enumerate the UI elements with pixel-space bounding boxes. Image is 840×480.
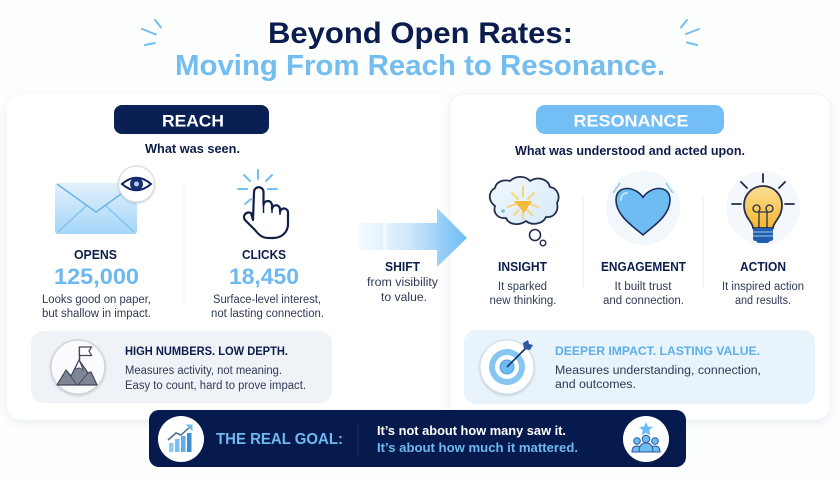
icon: mountain flag (51, 340, 105, 394)
callout: deeper impact (464, 330, 815, 404)
metric: opens: 125,000 (54, 264, 139, 289)
panel: resonance (450, 94, 830, 420)
metric: opens (42, 247, 151, 320)
callout: high numbers (31, 331, 332, 403)
goal statement: It’s about how much it mattered. (377, 441, 578, 455)
icon: growth chart (158, 416, 204, 462)
item: action (722, 259, 804, 307)
icon: light bulb (726, 171, 800, 245)
icon: heart (606, 171, 680, 245)
item: engagement: and connection. (603, 295, 684, 307)
item: engagement: It built trust (614, 281, 672, 293)
sparkle left (142, 20, 161, 45)
arrow: shift (358, 208, 467, 267)
metric: clicks: CLICKS (242, 247, 286, 262)
metric: opens: but shallow in impact. (42, 308, 151, 320)
metric: opens: Looks good on paper, (42, 294, 151, 306)
metric: clicks (211, 247, 324, 320)
callout: high numbers: Measures activity, not meaning. (125, 365, 282, 377)
title line 2: Moving From Reach to Resonance. (175, 50, 665, 82)
item: insight (490, 259, 556, 307)
metric: clicks: 18,450 (229, 264, 299, 289)
panel: reach (7, 94, 452, 420)
resonance subtitle: What was understood and acted upon. (515, 144, 745, 158)
shift label: SHIFT (385, 260, 420, 274)
banner: the real goal: THE REAL GOAL: (216, 431, 343, 448)
panel background (7, 94, 452, 420)
icon: thought cloud (490, 177, 559, 246)
item: engagement (601, 259, 686, 307)
item: insight: It sparked (498, 281, 547, 293)
metric: clicks: Surface-level interest, (213, 294, 321, 306)
reach pill: REACH (162, 112, 224, 130)
callout: high numbers: HIGH NUMBERS. LOW DEPTH. (125, 344, 288, 358)
shift label (367, 260, 438, 304)
item: insight: new thinking. (490, 295, 556, 307)
sparkle right (681, 20, 699, 45)
resonance pill (536, 105, 724, 134)
resonance pill: RESONANCE (574, 112, 688, 130)
icon: clicking hand (238, 170, 288, 238)
item: engagement: ENGAGEMENT (601, 259, 686, 274)
panel background (450, 94, 830, 420)
metric: clicks: not lasting connection. (211, 308, 324, 320)
metric: opens: OPENS (74, 247, 117, 262)
reach pill (114, 105, 269, 134)
item: action: and results. (735, 295, 791, 307)
callout: deeper impact: and outcomes. (555, 379, 636, 391)
title line 1: Beyond Open Rates: (268, 17, 573, 50)
goal statement (377, 424, 578, 455)
banner: the real goal (149, 410, 686, 467)
callout: high numbers: Easy to count, hard to prove impact. (125, 380, 306, 392)
shift label: to value. (381, 292, 427, 304)
reach subtitle: What was seen. (145, 142, 240, 156)
shift label: from visibility (367, 277, 438, 289)
goal statement: It’s not about how many saw it. (377, 424, 566, 438)
title (175, 17, 665, 82)
icon: people with star (623, 416, 669, 462)
item: action: It inspired action (722, 281, 804, 293)
item: action: ACTION (740, 259, 786, 274)
callout: deeper impact: Measures understanding, connection, (555, 365, 761, 377)
callout: deeper impact: DEEPER IMPACT. LASTING VALUE. (555, 344, 760, 358)
icon: target (480, 340, 534, 394)
item: insight: INSIGHT (498, 259, 547, 274)
icon: envelope with eye (55, 166, 154, 234)
